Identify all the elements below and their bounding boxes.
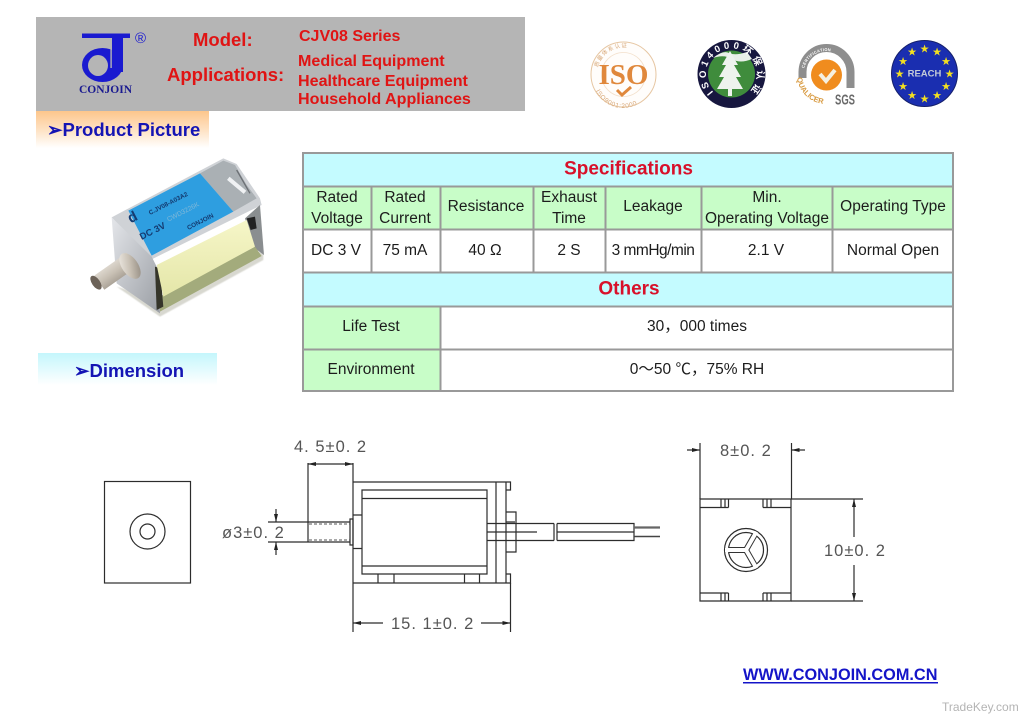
dimension: 15.1 length: 15. 1±0. 2 xyxy=(391,615,474,633)
dimension: 4.5 length xyxy=(294,438,367,632)
dimension: 15.1 length xyxy=(353,583,510,633)
right frame xyxy=(245,205,264,255)
specification values: 2.1 V xyxy=(748,242,785,259)
product photo: solenoid valve: CWD3226K xyxy=(166,201,201,223)
side face xyxy=(112,217,160,313)
drawing: front view xyxy=(104,482,190,583)
corner metal detail xyxy=(200,161,257,212)
column headers: Resistance xyxy=(448,198,524,215)
applications label: Applications: xyxy=(167,64,284,85)
dimension: 10 height xyxy=(791,499,886,601)
certification badge: ISO 9001: ISO9001:2000 xyxy=(596,89,636,108)
applications list: Household Appliances xyxy=(298,90,471,108)
life test row: Life Test xyxy=(342,318,400,335)
environment row: Environment xyxy=(327,361,415,378)
applications list xyxy=(298,52,471,108)
dimension: diameter 3 xyxy=(222,509,308,555)
certification badge: REACH: ★ xyxy=(898,80,908,93)
certification badge: ISO 9001: ISO xyxy=(599,59,648,91)
shadow xyxy=(117,250,263,317)
website link: WWW.CONJOIN.COM.CN xyxy=(743,666,937,684)
dimension: 8 width: 8±0. 2 xyxy=(720,442,772,460)
logo: Conjoin xyxy=(79,30,146,96)
model value: CJV08 Series xyxy=(299,28,401,45)
lead wires xyxy=(487,524,660,540)
dimension: diameter 3: ø3±0. 2 xyxy=(222,524,285,542)
specification values: 3 mmHg/min xyxy=(612,242,694,259)
specification values: 75 mA xyxy=(383,242,428,259)
specification values: 40 Ω xyxy=(468,242,502,259)
stem xyxy=(99,260,132,283)
life test row xyxy=(303,307,953,349)
column headers: Exhaust xyxy=(541,189,598,206)
others header: Others xyxy=(598,278,660,300)
lower coil xyxy=(160,247,262,312)
certification badge: REACH: REACH xyxy=(908,68,942,80)
product photo: solenoid valve: DC 3V xyxy=(138,220,168,242)
dimension: 10 height: 10±0. 2 xyxy=(824,542,886,560)
heading: product picture: ➢Product Picture xyxy=(47,119,200,140)
column headers: Voltage xyxy=(311,210,363,227)
certification badge: SGS Qualicert: CERTIFICATION xyxy=(802,48,830,68)
logo: Conjoin: ® xyxy=(135,30,146,47)
valve body xyxy=(350,482,516,583)
certification badge: SGS Qualicert xyxy=(796,44,855,108)
certification badge: REACH: ★ xyxy=(941,55,951,68)
dimension: 4.5 length: 4. 5±0. 2 xyxy=(294,438,367,456)
specifications header: Specifications xyxy=(564,158,693,180)
certification badge: REACH: ★ xyxy=(907,89,917,102)
column headers: Min. xyxy=(752,189,782,206)
column headers: Operating Voltage xyxy=(705,210,829,227)
port symbol xyxy=(724,528,768,572)
column headers: Rated xyxy=(316,189,358,206)
flange xyxy=(115,249,145,283)
certification badge: ISO 9001: 质量体系认证 xyxy=(594,43,627,68)
product photo: solenoid valve xyxy=(88,158,264,317)
logo: Conjoin: CONJOIN xyxy=(79,84,133,96)
environment row: 0～50 ℃，75% RH xyxy=(630,361,764,378)
watermark: TradeKey.com xyxy=(942,700,1019,714)
specification values: Normal Open xyxy=(847,242,939,259)
metal frame top xyxy=(112,158,262,259)
certification badge: REACH: ★ xyxy=(945,68,955,80)
specifications header xyxy=(303,153,953,186)
column headers: Rated xyxy=(384,189,426,206)
heading: dimension: ➢Dimension xyxy=(74,360,184,381)
header banner xyxy=(36,17,525,111)
yellow coil xyxy=(157,220,255,297)
inlet stem xyxy=(308,522,350,542)
others header xyxy=(303,273,953,306)
product photo: solenoid valve: CONJOIN xyxy=(186,212,215,232)
product photo: solenoid valve: C.JV08-A03A2 xyxy=(148,191,190,217)
blue label xyxy=(128,173,233,256)
certification badge: REACH: ★ xyxy=(898,55,908,68)
life test row: 30，000 times xyxy=(647,318,747,335)
certification badge: REACH xyxy=(892,40,958,106)
product photo: solenoid valve: d xyxy=(125,209,140,227)
specification values xyxy=(303,230,953,272)
certification badge: REACH: ★ xyxy=(941,80,951,93)
column headers: Time xyxy=(552,210,586,227)
specifications table xyxy=(303,153,953,391)
column headers xyxy=(303,187,953,229)
column headers: Leakage xyxy=(623,198,683,215)
certification badge: REACH: ★ xyxy=(895,68,905,80)
drawing: side view xyxy=(222,438,660,633)
certification badge: ISO 14000: ISO14000环保认证 xyxy=(699,42,766,96)
dimension: 8 width xyxy=(687,442,805,499)
certification badge: REACH: ★ xyxy=(920,42,930,56)
certification badge: ISO 9001 xyxy=(590,42,656,108)
certification badge: REACH: ★ xyxy=(907,46,917,58)
certification badge: REACH: ★ xyxy=(932,89,942,102)
column headers: Operating Type xyxy=(840,198,946,215)
certification badge: SGS Qualicert: SGS xyxy=(835,92,855,108)
model label: Model: xyxy=(193,29,253,50)
heading: product picture xyxy=(36,111,209,148)
column headers: Current xyxy=(379,210,432,227)
applications list: Healthcare Equipment xyxy=(298,72,469,90)
environment row xyxy=(303,350,953,391)
certification badge: REACH: ★ xyxy=(920,92,930,106)
specification values: 2 S xyxy=(557,242,581,259)
heading: dimension xyxy=(38,353,217,385)
specification values: DC 3 V xyxy=(311,242,362,259)
certification badge: REACH: ★ xyxy=(932,46,942,58)
applications list: Medical Equipment xyxy=(298,52,445,70)
drawing: end view xyxy=(687,442,886,601)
